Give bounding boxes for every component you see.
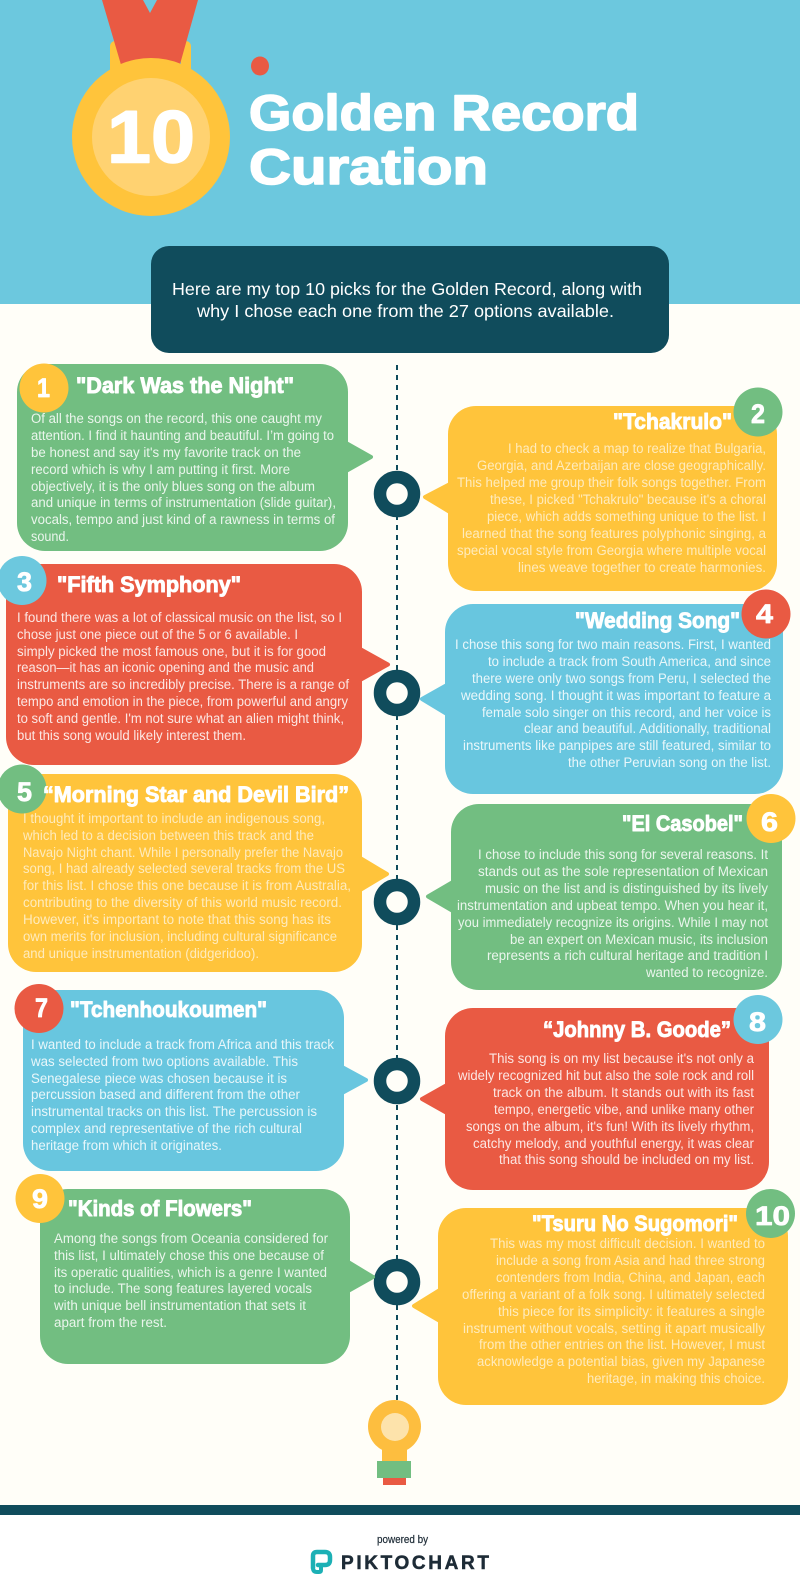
panel: 5 Morning Star and Devil Bird: which led to a decision between this track and the xyxy=(22,828,314,843)
panel: 6 El Casobel: stands out as the sole representation of Mexican xyxy=(478,864,768,879)
panel: 5 Morning Star and Devil Bird: for this list. I chose this one because it is from Australia, xyxy=(23,878,351,893)
panel: 8 Johnny B. Goode: “Johnny B. Goode” xyxy=(543,1017,731,1042)
panel: 9 Kinds of Flowers: apart from the rest. xyxy=(54,1315,167,1330)
panel: 2 Tchakrulo: lines weave together to create harmonies. xyxy=(518,560,766,575)
panel: 1 Dark Was the Night: "Dark Was the Night" xyxy=(76,373,294,398)
panel: 2 Tchakrulo: This helped me group their folk songs together. From xyxy=(457,475,766,490)
panel: 4 Wedding Song: I chose this song for two main reasons. First, I wanted xyxy=(455,637,771,652)
icon: light bulb at end of timeline xyxy=(368,1400,421,1485)
panel: 4 Wedding Song: instruments like panpipes are still featured, similar to xyxy=(463,738,771,753)
panel: 4 Wedding Song: 4 xyxy=(756,599,773,629)
panel: 10 Tsuru No Sugomori: "Tsuru No Sugomori" xyxy=(532,1211,738,1236)
panel: 5 Morning Star and Devil Bird: “Morning Star and Devil Bird” xyxy=(43,782,349,807)
panel: 4 Wedding Song: wedding song. I thought it was important to feature a xyxy=(460,688,771,703)
panel: 9 Kinds of Flowers xyxy=(16,1174,373,1364)
panel: 7 Tchenhoukoumen: 7 xyxy=(35,993,48,1023)
panel: 1 Dark Was the Night: record which is why I am putting it first. More xyxy=(31,462,290,477)
panel: 8 Johnny B. Goode xyxy=(422,995,782,1190)
panel: 10 Tsuru No Sugomori: this piece for its simplicity: it features a single xyxy=(498,1304,765,1319)
panel: 3 Fifth Symphony: 3 xyxy=(17,567,32,597)
panel: 3 Fifth Symphony: to soft and gentle. I'm not sure what an alien might think, xyxy=(17,711,344,726)
panel: 5 Morning Star and Devil Bird: own merits for inclusion, including cultural significance xyxy=(23,929,337,944)
panel: 5 Morning Star and Devil Bird: However, it's important to note that this song has its xyxy=(23,912,331,927)
panel: 5 Morning Star and Devil Bird: contributing to the diversity of this world music record. xyxy=(23,895,342,910)
panel: 3 Fifth Symphony: chose just one piece out of the 5 or 6 available. I xyxy=(17,627,298,642)
footer: Piktochart wordmark: PIKTOCHART xyxy=(341,1553,489,1574)
panel: 6 El Casobel: represents a rich cultural heritage and tradition I xyxy=(487,948,768,963)
panel: 3 Fifth Symphony: tempo and emotion in the piece, from powerful and angry xyxy=(17,694,348,709)
title: Golden Record xyxy=(249,85,639,141)
title: Curation xyxy=(249,139,488,195)
panel: 1 Dark Was the Night: and unique in terms of instrumentation (slide guitar), xyxy=(31,495,336,510)
timeline ring 1 xyxy=(380,477,414,511)
decorative red dot xyxy=(251,56,269,76)
panel: 7 Tchenhoukoumen: instrumental tracks on this list. The percussion is xyxy=(31,1104,317,1119)
panel: 1 Dark Was the Night: attention. I find it haunting and beautiful. I’m going to xyxy=(31,428,334,443)
panel: 6 El Casobel: instrumentation and upbeat tempo. When you hear it, xyxy=(457,898,768,913)
panel: 6 El Casobel: I chose to include this song for several reasons. It xyxy=(478,847,768,862)
panel: 6 El Casobel: wanted to recognize. xyxy=(645,965,768,980)
intro box: Here are my top 10 picks for the Golden Record, along with xyxy=(172,279,642,299)
panel: 10 Tsuru No Sugomori: offering a variant of a folk song. I ultimately selected xyxy=(462,1287,765,1302)
panel: 6 El Casobel: music on the list and is distinguished by its lively xyxy=(485,881,768,896)
panel: 10 Tsuru No Sugomori: include a song from Asia and had three strong xyxy=(496,1253,765,1268)
panel: 10 Tsuru No Sugomori: contenders from India, China, and Japan, each xyxy=(496,1270,765,1285)
icon: Piktochart logo xyxy=(313,1552,330,1572)
timeline dashed line xyxy=(396,365,398,1402)
panel: 9 Kinds of Flowers: "Kinds of Flowers" xyxy=(68,1196,252,1221)
panel: 10 Tsuru No Sugomori: This was my most difficult decision. I wanted to xyxy=(490,1236,765,1251)
panel: 7 Tchenhoukoumen: was selected from two options available. This xyxy=(30,1054,298,1069)
panel: 6 El Casobel: be an expert on Mexican music, its inclusion xyxy=(510,932,768,947)
panel: 5 Morning Star and Devil Bird: song, I had already selected several tracks from the US xyxy=(23,861,345,876)
panel: 6 El Casobel: "El Casobel" xyxy=(622,811,743,836)
panel: 1 Dark Was the Night xyxy=(17,364,371,551)
panel: 3 Fifth Symphony: simply picked the most famous one, but it is for good xyxy=(17,644,326,659)
panel: 10 Tsuru No Sugomori: acknowledge a potential bias, given my Japanese xyxy=(477,1354,765,1369)
panel: 1 Dark Was the Night: objectively, it is the only blues song on the album xyxy=(31,479,315,494)
panel: 3 Fifth Symphony: but this song would likely interest them. xyxy=(17,728,246,743)
panel: 3 Fifth Symphony: reason—it has an iconic opening and the music and xyxy=(17,660,314,675)
panel: 7 Tchenhoukoumen: complex and representative of the rich cultural xyxy=(31,1121,302,1136)
panel: 8 Johnny B. Goode: songs on the album, it's fun! With its lively rhythm, xyxy=(466,1119,754,1134)
panel: 5 Morning Star and Devil Bird: 5 xyxy=(17,777,32,807)
panel: 2 Tchakrulo: 2 xyxy=(751,399,765,429)
panel: 6 El Casobel xyxy=(428,794,796,990)
panel: 1 Dark Was the Night: 1 xyxy=(37,373,50,403)
panel: 9 Kinds of Flowers: with unique bell instrumentation that sets it xyxy=(53,1298,306,1313)
panel: 8 Johnny B. Goode: catchy melody, and youthful energy, it was clear xyxy=(473,1136,754,1151)
panel: 10 Tsuru No Sugomori: 10 xyxy=(755,1201,790,1231)
panel: 10 Tsuru No Sugomori: instrument without vocals, setting it apart musically xyxy=(463,1321,765,1336)
panel: 10 Tsuru No Sugomori xyxy=(414,1189,795,1405)
panel: 1 Dark Was the Night: sound. xyxy=(31,529,69,544)
panel: 8 Johnny B. Goode: widely recognized hit but also the sole rock and roll xyxy=(457,1068,754,1083)
panel: 7 Tchenhoukoumen: Senegalese piece was chosen because it is xyxy=(31,1071,287,1086)
icon: gold medal xyxy=(72,0,230,216)
panel: 4 Wedding Song: "Wedding Song" xyxy=(575,608,740,633)
title xyxy=(249,85,639,195)
panel: 1 Dark Was the Night: be honest and say it's my favorite track on the xyxy=(31,445,301,460)
panel: 9 Kinds of Flowers: its operatic qualities, which is a genre I wanted xyxy=(54,1265,327,1280)
footer: powered by label: powered by xyxy=(377,1534,428,1546)
panel: 4 Wedding Song: there were only two songs from Peru, I selected the xyxy=(472,671,771,686)
panel: 9 Kinds of Flowers: this list, I ultimately chose this one because of xyxy=(54,1248,324,1263)
timeline ring 5 xyxy=(380,1265,414,1299)
panel: 8 Johnny B. Goode: 8 xyxy=(749,1007,766,1037)
panel: 8 Johnny B. Goode: tempo, energetic vibe, and unlike many other xyxy=(494,1102,754,1117)
panel: 7 Tchenhoukoumen xyxy=(14,984,366,1171)
panel: 10 Tsuru No Sugomori: from the other entries on the list. However, I must xyxy=(479,1337,765,1352)
panel: 2 Tchakrulo: learned that the song features polyphonic singing, a xyxy=(462,526,766,541)
panel: 3 Fifth Symphony: instruments are so incredibly precise. There is a range of xyxy=(17,677,349,692)
timeline ring 3 xyxy=(380,885,414,919)
panel: 4 Wedding Song: clear and beautiful. Additionally, traditional xyxy=(524,721,771,736)
panel: 7 Tchenhoukoumen: I wanted to include a track from Africa and this track xyxy=(31,1037,334,1052)
panel: 8 Johnny B. Goode: that this song should be included on my list. xyxy=(499,1152,754,1167)
panel: 9 Kinds of Flowers: to include. The song features layered vocals xyxy=(54,1281,312,1296)
panel: 2 Tchakrulo: these, I picked "Tchakrulo" because it's a choral xyxy=(490,492,766,507)
panel: 2 Tchakrulo: I had to check a map to realize that Bulgaria, xyxy=(508,441,766,456)
panel: 5 Morning Star and Devil Bird: and unique instrumentation (didgeridoo). xyxy=(23,946,259,961)
panel: 7 Tchenhoukoumen: "Tchenhoukoumen" xyxy=(70,997,267,1022)
panel: 4 Wedding Song: to include a track from South America, and since xyxy=(488,654,771,669)
panel: 10 Tsuru No Sugomori: heritage, in making this choice. xyxy=(587,1371,765,1386)
panel: 2 Tchakrulo: Georgia, and Azerbaijan are close geographically. xyxy=(477,458,766,473)
panel: 3 Fifth Symphony: I found there was a lot of classical music on the list, so I xyxy=(17,610,342,625)
panel: 4 Wedding Song: female solo singer on this record, and her voice is xyxy=(482,705,771,720)
panel: 6 El Casobel: 6 xyxy=(761,807,778,837)
panel: 9 Kinds of Flowers: 9 xyxy=(32,1184,48,1214)
footer band xyxy=(0,1505,800,1515)
panel: 4 Wedding Song: the other Peruvian song on the list. xyxy=(568,755,771,770)
panel: 5 Morning Star and Devil Bird xyxy=(0,764,387,972)
panel: 8 Johnny B. Goode: This song is on my list because it's not only a xyxy=(489,1051,754,1066)
panel: 2 Tchakrulo: "Tchakrulo" xyxy=(613,409,732,434)
footer background xyxy=(0,1515,800,1595)
panel: 1 Dark Was the Night: Of all the songs on the record, this one caught my xyxy=(31,411,322,426)
panel: 6 El Casobel: you immediately recognize its origins. While I may not xyxy=(458,915,768,930)
intro box xyxy=(151,246,669,353)
intro box: why I chose each one from the 27 options available. xyxy=(196,301,614,321)
timeline ring 2 xyxy=(380,676,414,710)
panel: 2 Tchakrulo xyxy=(425,388,782,591)
panel: 2 Tchakrulo: piece, which adds something unique to the list. I xyxy=(487,509,766,524)
panel: 7 Tchenhoukoumen: heritage from which it originates. xyxy=(31,1138,222,1153)
panel: 1 Dark Was the Night: vocals, tempo and just kind of a rawness in terms of xyxy=(31,512,335,527)
panel: 2 Tchakrulo: special vocal style from Georgia where multiple vocal xyxy=(457,543,766,558)
panel: 4 Wedding Song xyxy=(422,590,790,794)
panel: 3 Fifth Symphony xyxy=(0,556,388,765)
timeline ring 4 xyxy=(380,1064,414,1098)
header background xyxy=(0,0,800,304)
panel: 5 Morning Star and Devil Bird: I thought it important to include an indigenous song, xyxy=(23,811,325,826)
panel: 8 Johnny B. Goode: track on the album. It stands out with its fast xyxy=(493,1085,754,1100)
panel: 9 Kinds of Flowers: Among the songs from Oceania considered for xyxy=(54,1231,328,1246)
panel: 5 Morning Star and Devil Bird: Navajo Night chant. While I personally prefer the Navajo xyxy=(23,845,343,860)
panel: 3 Fifth Symphony: "Fifth Symphony" xyxy=(57,572,241,597)
panel: 7 Tchenhoukoumen: percussion based and different from the other xyxy=(31,1087,300,1102)
icon: gold medal: 10 xyxy=(107,96,195,178)
